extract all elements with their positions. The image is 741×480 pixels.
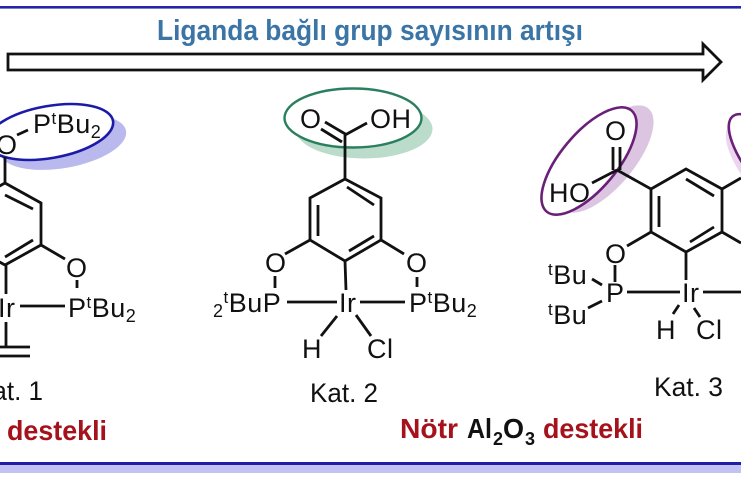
- label: Ir: Ir: [682, 278, 700, 308]
- label: PtBu2 upper: Bu: [57, 109, 91, 139]
- bonds: Kat. 1: [0, 130, 77, 356]
- bonds: Kat. 2: [275, 122, 417, 336]
- label: Ir: Ir: [339, 288, 356, 318]
- label: ring O: O: [605, 239, 627, 269]
- highlight oval: green: [284, 88, 432, 158]
- label: tBu upper: Bu: [553, 260, 587, 290]
- arrow: [8, 44, 721, 80]
- support label centre: Al: [467, 413, 492, 444]
- label: PtBu2 lower: t: [87, 293, 92, 312]
- top frame line: [0, 6, 741, 9]
- caption: Kat. 2: Kat. 2: [310, 378, 378, 408]
- label: PtBu2 lower: Bu: [92, 293, 126, 323]
- label: Cl: Cl: [696, 315, 722, 345]
- label: HO: HO: [549, 178, 590, 208]
- label: 2tBuP: 2: [213, 301, 224, 321]
- support label left: destekli: [7, 415, 107, 446]
- bottom frame band: [0, 462, 741, 473]
- title: Liganda bağlı grup sayısının artışı: [157, 15, 583, 47]
- labels: ring oxygens: O: [265, 248, 287, 278]
- labels: carboxyl: O: [300, 104, 322, 134]
- label: tBu lower: Bu: [553, 300, 587, 330]
- label: PtBu2 upper: t: [52, 109, 57, 128]
- label: H: H: [302, 334, 322, 364]
- highlight ovals: purple: [525, 90, 741, 242]
- label: carbonyl O: O: [605, 116, 627, 146]
- label: O atoms: [0, 130, 88, 283]
- support label centre: [400, 413, 643, 449]
- bonds: Kat. 3: [588, 147, 741, 317]
- label: PtBu2 upper: 2: [91, 122, 101, 142]
- label: PtBu2: P: [409, 288, 428, 318]
- label: P: P: [606, 278, 625, 308]
- support label centre: Nötr: [400, 413, 458, 444]
- caption: Kat. 3: Kat. 3: [654, 372, 723, 402]
- label: H: H: [656, 315, 676, 345]
- label: 2tBuP: t: [224, 288, 229, 307]
- label: PtBu2 upper: P: [33, 109, 52, 139]
- label: tBu lower: t: [548, 300, 553, 319]
- support label centre: destekli: [543, 413, 643, 444]
- structure: Kat. 1: [0, 95, 136, 356]
- label: 2tBuP: BuP: [229, 288, 281, 318]
- labels: ring oxygens: [265, 248, 428, 278]
- structure: Kat. 2: [213, 88, 477, 364]
- labels: carboxyl: OH: [370, 104, 412, 134]
- label: PtBu2 lower: 2: [126, 306, 136, 326]
- labels: ring oxygens: O: [406, 248, 428, 278]
- label: tBu upper: t: [548, 260, 553, 279]
- structure: Kat. 3: [525, 90, 741, 345]
- support label centre: 3: [525, 429, 535, 449]
- support label centre: 2: [493, 429, 503, 449]
- label: O atoms: O: [66, 253, 88, 283]
- labels: carboxyl: [300, 104, 412, 134]
- highlight oval: blue: [0, 95, 131, 179]
- label: PtBu2: Bu: [433, 288, 467, 318]
- label: PtBu2: t: [428, 288, 433, 307]
- label: PtBu2: 2: [467, 301, 477, 321]
- support label centre: O: [503, 413, 524, 444]
- label: PtBu2 lower: P: [68, 293, 87, 323]
- label: Cl: Cl: [367, 334, 394, 364]
